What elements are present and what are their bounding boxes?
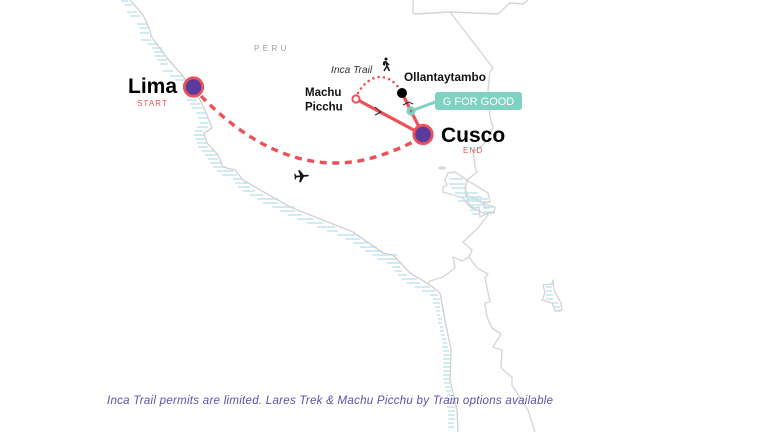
marker: Machu Picchu	[352, 95, 360, 103]
label: Cusco: Cusco	[441, 124, 505, 147]
G for Good label: G FOR GOOD	[443, 96, 514, 108]
flight route: Lima to Cusco	[201, 96, 413, 163]
walking route: Inca Trail	[358, 77, 401, 93]
label: Machu Picchu	[305, 87, 343, 114]
road route: Ollantaytambo to Cusco	[402, 93, 423, 135]
G for Good marker	[406, 106, 416, 116]
inland borders	[413, 0, 535, 432]
icon: hiker	[383, 58, 390, 71]
marker: Lima	[184, 78, 203, 96]
G for Good label	[435, 92, 522, 110]
label: start: START	[137, 99, 168, 108]
lake Titicaca	[438, 166, 495, 217]
icon: direction arrow on rail route	[375, 107, 381, 115]
label: Ollantaytambo: Ollantaytambo	[404, 70, 486, 84]
coastline	[130, 0, 458, 432]
label: end: END	[463, 146, 483, 155]
rail route: Machu Picchu to Cusco	[356, 99, 423, 135]
footer note: Inca Trail permits are limited. Lares Trek & Machu Picchu by Train options available	[107, 395, 553, 407]
label: Machu Picchu: Machu	[305, 87, 341, 99]
ocean hatching along the coast	[121, 1, 455, 427]
icon: plane	[294, 169, 309, 183]
marker: Cusco	[414, 125, 432, 144]
label: Lima: Lima	[128, 75, 177, 98]
label: Inca Trail: Inca Trail	[331, 65, 373, 76]
G for Good connector	[411, 101, 438, 111]
lake Poopo	[542, 280, 562, 311]
label: Machu Picchu: Picchu	[305, 102, 343, 114]
country label: Peru: PERU	[254, 44, 290, 53]
icon: direction arrow on road route	[403, 102, 413, 105]
marker: Ollantaytambo	[397, 88, 407, 98]
